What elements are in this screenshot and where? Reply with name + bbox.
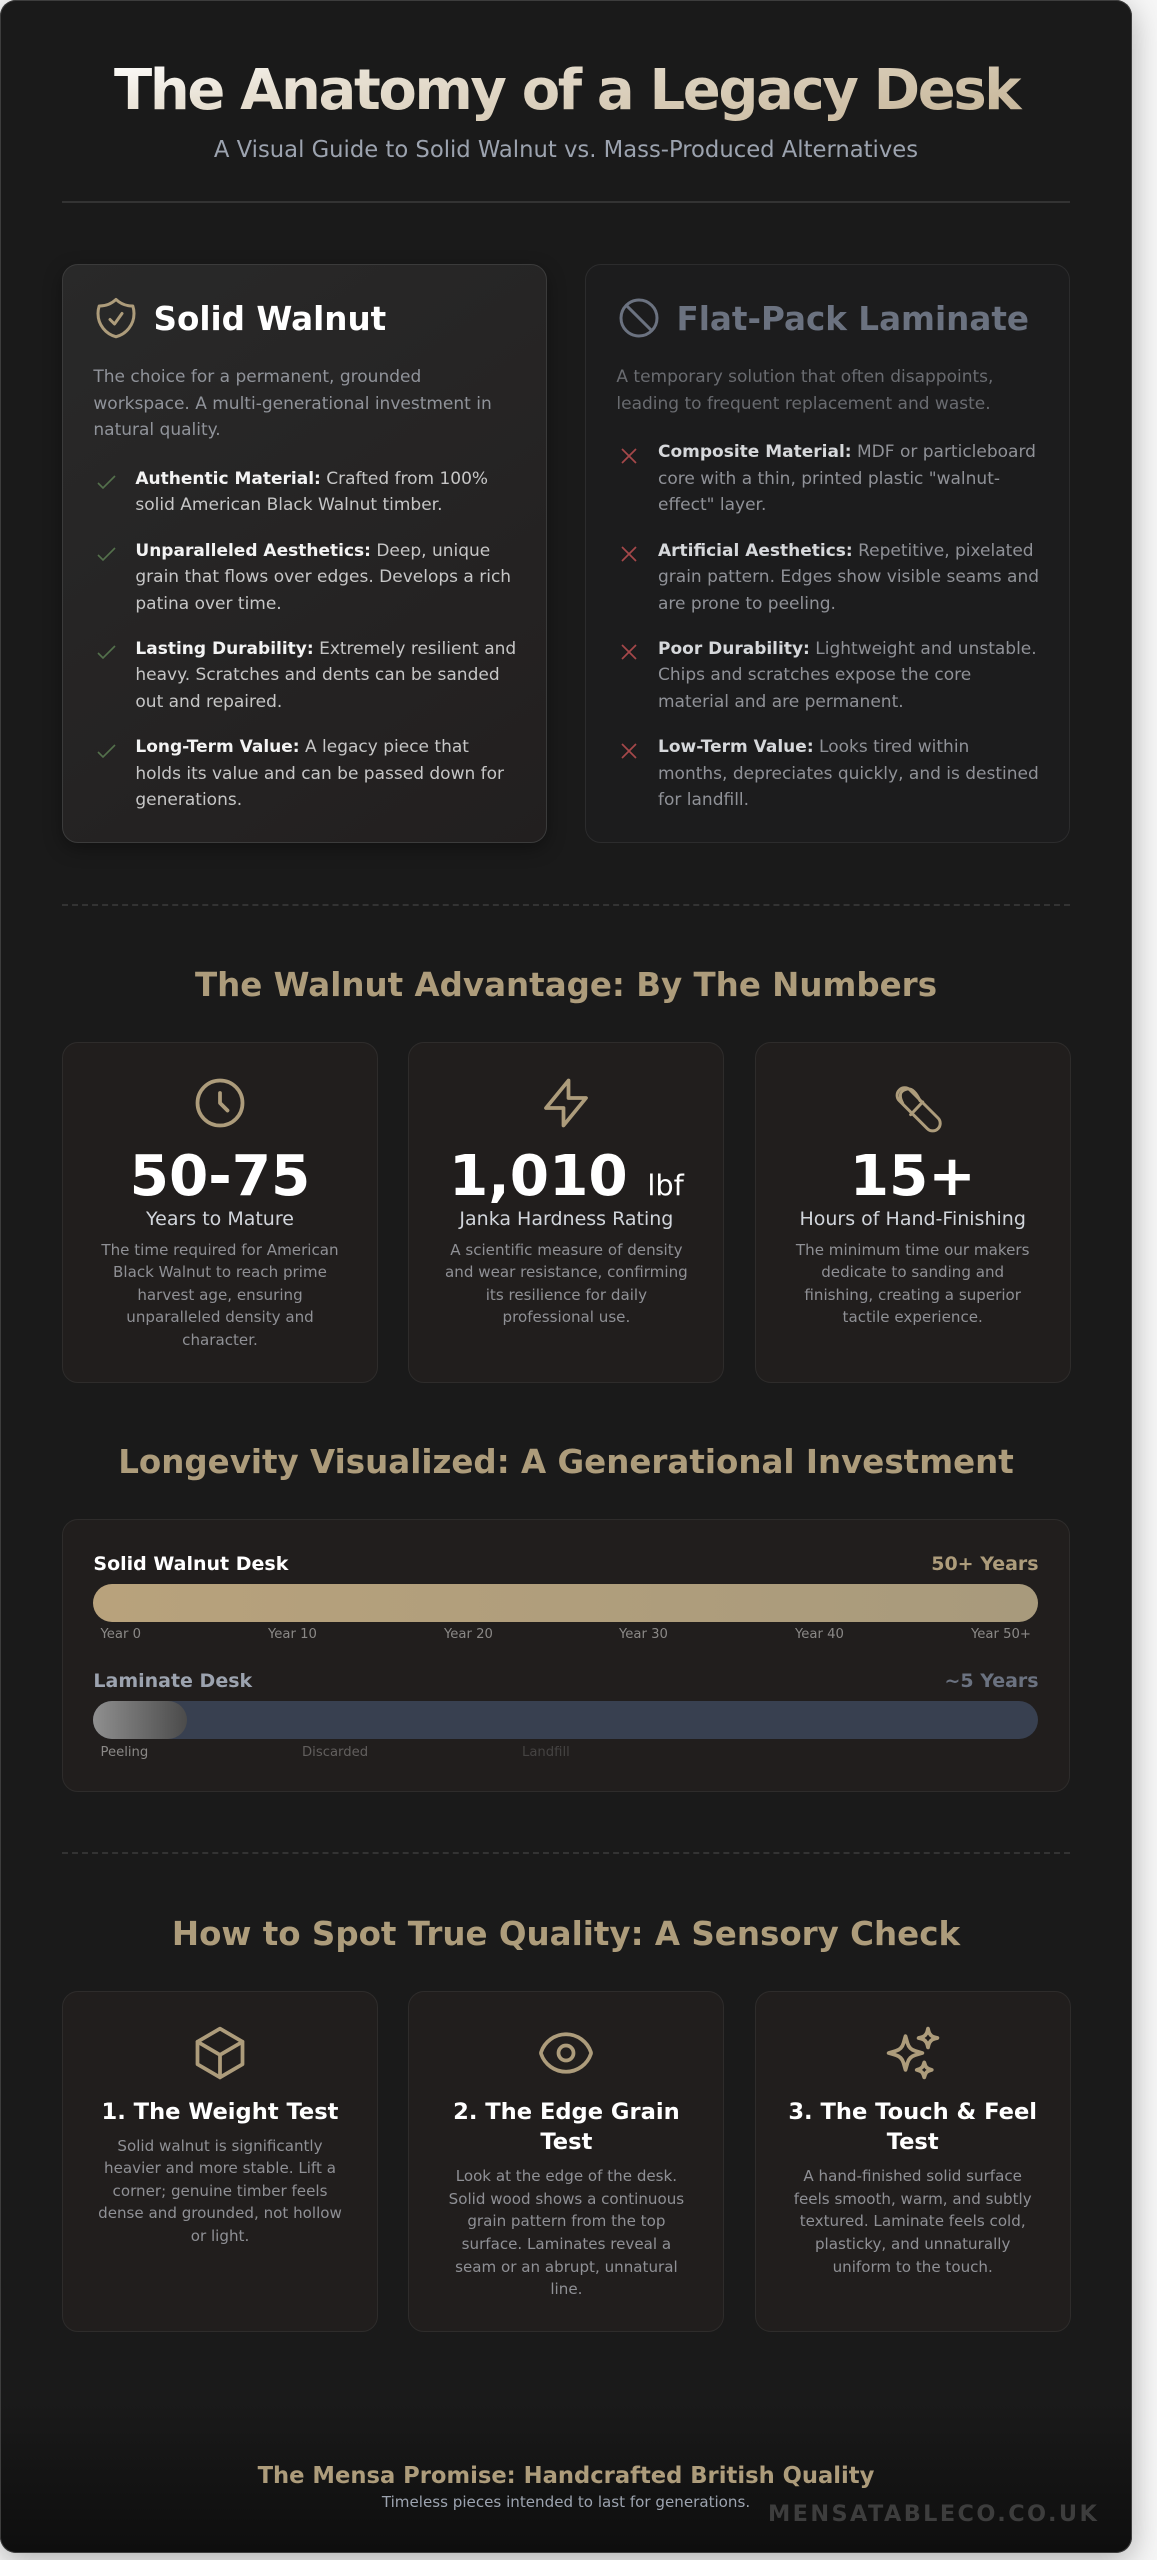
laminate list [622, 442, 1039, 810]
laminate stage labels [100, 1745, 570, 1760]
test description: heavier and more stable. Lift a [104, 2159, 336, 2177]
walnut axis labels: Year 0 [100, 1627, 141, 1642]
test title: Test [887, 2129, 939, 2155]
item: authentic material: solid American Black Walnut timber. [135, 495, 443, 515]
stat description: A scientific measure of density [450, 1240, 683, 1258]
stat description: character. [182, 1331, 258, 1349]
walnut description: workspace. A multi-generational investment in [93, 394, 492, 414]
test description [794, 2167, 1032, 2276]
item: unparalleled aesthetics: patina over time. [135, 594, 282, 614]
item: poor durability: Poor Durability: Lightweight and unstable. [658, 639, 1037, 659]
test description: surface. Laminates reveal a [462, 2235, 671, 2253]
test description: corner; genuine timber feels [113, 2182, 327, 2200]
watermark: MENSATABLECO.CO.UK [768, 2501, 1099, 2527]
test description: textured. Laminate feels cold, [800, 2212, 1026, 2230]
stat description: finishing, creating a superior [804, 1286, 1021, 1304]
test description: grain pattern from the top [467, 2212, 665, 2230]
walnut axis labels: Year 50+ [971, 1627, 1031, 1642]
item: artificial aesthetics: grain pattern. Edges show visible seams and [658, 567, 1039, 587]
walnut axis labels: Year 10 [268, 1627, 317, 1642]
laminate description [616, 367, 993, 414]
cross: aesthetics [622, 546, 636, 562]
footer title: The Mensa Promise: Handcrafted British Quality [258, 2463, 874, 2489]
laminate stage labels: Peeling [100, 1745, 148, 1760]
stat description [445, 1240, 688, 1326]
value: ~5 years: ~5 Years [944, 1670, 1039, 1692]
stat label: Janka Hardness Rating [459, 1208, 673, 1230]
test description: plasticky, and unnaturally [815, 2235, 1010, 2253]
test description: feels smooth, warm, and subtly [794, 2190, 1032, 2208]
test description: Solid wood shows a continuous [449, 2190, 684, 2208]
walnut axis labels [100, 1627, 1031, 1642]
laminate description: A temporary solution that often disappoints, [616, 367, 993, 387]
subtitle: A Visual Guide to Solid Walnut vs. Mass-Produced Alternatives [214, 137, 918, 163]
check: material [98, 476, 116, 489]
test card: touch and feel [755, 1991, 1071, 2332]
item: low-term value [658, 737, 1039, 810]
item: authentic material: Authentic Material: Crafted from 100% [135, 469, 488, 489]
panel: flat-pack laminate [585, 264, 1070, 843]
item: composite material [658, 442, 1036, 515]
label: laminate desk: Laminate Desk [93, 1670, 252, 1692]
stat description: The time required for American [101, 1240, 339, 1258]
footer subtitle: Timeless pieces intended to last for generations. [382, 2492, 750, 2510]
heading: solid walnut: Solid Walnut [154, 300, 386, 338]
stat description: professional use. [502, 1308, 630, 1326]
item: low-term value: for landfill. [658, 790, 749, 810]
test description [98, 2136, 342, 2245]
test description: uniform to the touch. [833, 2258, 993, 2276]
test title: Test [540, 2129, 592, 2155]
test title [453, 2099, 680, 2155]
bar fill: 5 years [93, 1701, 187, 1739]
item: artificial aesthetics: are prone to peeling. [658, 594, 836, 614]
item: unparalleled aesthetics: Unparalleled Aesthetics: Deep, unique [135, 541, 490, 561]
test description [449, 2167, 684, 2298]
item: composite material: core with a thin, printed plastic "walnut- [658, 469, 1000, 489]
value: 50+ years: 50+ Years [931, 1553, 1039, 1575]
stat description [101, 1240, 339, 1349]
stat description: The minimum time our makers [796, 1240, 1029, 1258]
item: long-term value: generations. [135, 790, 242, 810]
stat card: years to mature [62, 1042, 378, 1383]
icon: sparkles [886, 2026, 940, 2080]
test description: Look at the edge of the desk. [456, 2167, 677, 2185]
label: solid walnut desk: Solid Walnut Desk [93, 1553, 288, 1575]
title: The Anatomy of a Legacy Desk [114, 58, 1019, 123]
laminate stage labels: Landfill [522, 1745, 570, 1760]
icon: clock [196, 1078, 244, 1128]
cross: material [622, 448, 636, 464]
test card: weight [62, 1991, 378, 2332]
item: poor durability [658, 639, 1037, 712]
item: lasting durability: heavy. Scratches and dents can be sanded [135, 665, 500, 685]
panel: solid walnut [62, 264, 547, 843]
item: artificial aesthetics: Artificial Aesthetics: Repetitive, pixelated [658, 541, 1034, 561]
icon: cube [196, 2026, 244, 2080]
item: low-term value: Low-Term Value: Looks tired within [658, 737, 969, 757]
laminate description: leading to frequent replacement and waste. [616, 394, 991, 414]
heading: flat-pack laminate: Flat-Pack Laminate [676, 300, 1029, 338]
test description: line. [550, 2280, 582, 2298]
heading: longevity: Longevity Visualized: A Generational Investment [118, 1443, 1014, 1481]
item: low-term value: months, depreciates quickly, and is destined [658, 764, 1039, 784]
item: poor durability: material and are permanent. [658, 692, 904, 712]
item: artificial aesthetics [658, 541, 1039, 614]
test card: edge grain [408, 1991, 724, 2332]
test title [788, 2099, 1037, 2155]
test title: 2. The Edge Grain [453, 2099, 680, 2125]
stat card: hand-finishing [755, 1042, 1071, 1383]
walnut axis labels: Year 40 [795, 1627, 844, 1642]
item: lasting durability: out and repaired. [135, 692, 282, 712]
check: aesthetics [98, 548, 116, 561]
heading: walnut advantage: The Walnut Advantage: By The Numbers [195, 966, 937, 1004]
stat card: janka hardness [408, 1042, 724, 1383]
stat description: dedicate to sanding and [821, 1263, 1004, 1281]
stat description: unparalleled density and [126, 1308, 314, 1326]
test description: Solid walnut is significantly [117, 2136, 323, 2154]
test title: 3. The Touch & Feel [788, 2099, 1037, 2125]
check: durability [98, 646, 116, 659]
icon: bolt [544, 1078, 588, 1128]
bar: walnut lifespan [93, 1584, 1038, 1622]
stat label: Years to Mature [146, 1208, 294, 1230]
item: unparalleled aesthetics [135, 541, 511, 614]
icon: eye [539, 2032, 593, 2074]
laminate stage labels: Discarded [302, 1745, 368, 1760]
item: long-term value [135, 737, 504, 810]
stat description: Black Walnut to reach prime [113, 1263, 327, 1281]
item: composite material: effect" layer. [658, 495, 766, 515]
icon: sanding tool [896, 1086, 942, 1132]
test description: seam or an abrupt, unnatural [455, 2258, 678, 2276]
heading: sensory check: How to Spot True Quality: A Sensory Check [172, 1915, 960, 1953]
walnut description: natural quality. [93, 420, 221, 440]
stat description: tactile experience. [843, 1308, 983, 1326]
cross: durability [622, 644, 636, 660]
cross: value [622, 743, 636, 759]
item: unparalleled aesthetics: grain that flows over edges. Develops a rich [135, 567, 511, 587]
icon: no symbol [620, 298, 658, 338]
stat label: Hours of Hand-Finishing [799, 1208, 1026, 1230]
stat value: 1,010 lbf [449, 1144, 684, 1209]
stat description [796, 1240, 1029, 1326]
test description: dense and grounded, not hollow [98, 2204, 342, 2222]
walnut description [93, 367, 492, 440]
stat description: and wear resistance, confirming [445, 1263, 688, 1281]
panel: longevity timeline [62, 1519, 1070, 1792]
walnut list [98, 469, 516, 810]
icon: shield check [96, 298, 136, 338]
check: value [98, 744, 116, 758]
item: composite material: Composite Material: MDF or particleboard [658, 442, 1036, 462]
bar: laminate lifespan [93, 1701, 1038, 1739]
stat value: 50-75 [130, 1144, 310, 1209]
item: long-term value: holds its value and can be passed down for [135, 764, 504, 784]
item: authentic material [135, 469, 488, 515]
walnut axis labels: Year 30 [619, 1627, 668, 1642]
stat description: harvest age, ensuring [137, 1286, 303, 1304]
stat value: 15+ [850, 1144, 976, 1209]
item: poor durability: Chips and scratches expose the core [658, 665, 971, 685]
item: lasting durability: Lasting Durability: Extremely resilient and [135, 639, 516, 659]
test description: A hand-finished solid surface [803, 2167, 1022, 2185]
walnut description: The choice for a permanent, grounded [93, 367, 421, 387]
test title: 1. The Weight Test [102, 2099, 338, 2125]
test description: or light. [191, 2227, 249, 2245]
stat description: its resilience for daily [486, 1286, 647, 1304]
item: lasting durability [135, 639, 516, 712]
walnut axis labels: Year 20 [444, 1627, 493, 1642]
item: long-term value: Long-Term Value: A legacy piece that [135, 737, 469, 757]
